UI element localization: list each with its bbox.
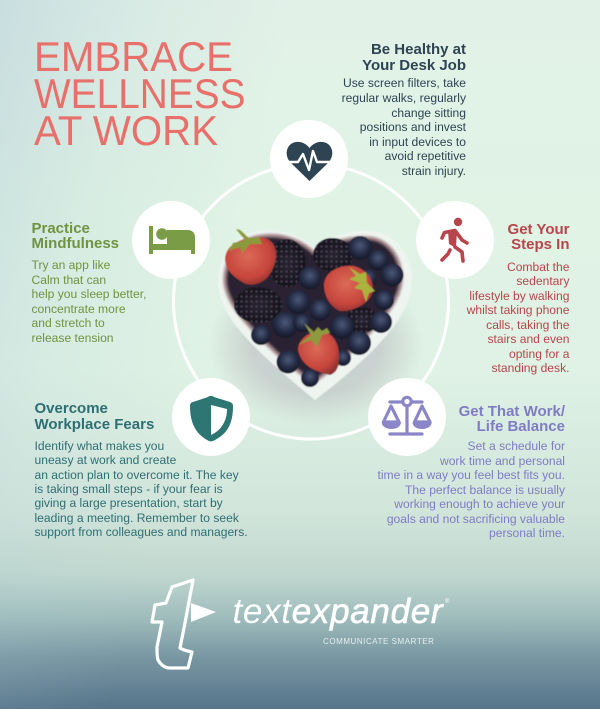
panel: get that work/life balance: goals and not sacrificing valuable xyxy=(387,512,565,526)
panel: practice mindfulness: Mindfulness xyxy=(32,235,119,252)
title: WELLNESS xyxy=(34,70,246,117)
panel: be healthy at your desk job xyxy=(342,41,466,178)
panel: get your steps in: sedentary xyxy=(516,274,570,288)
registered mark: ® xyxy=(445,599,449,605)
panel: overcome workplace fears: is taking small steps - if your fear is xyxy=(34,482,223,496)
ring connecting the five circles xyxy=(174,164,448,439)
panel: practice mindfulness: concentrate more xyxy=(32,302,126,316)
panel: get your steps in: Get Your xyxy=(508,221,570,238)
panel: get that work/life balance: Get That Work/ xyxy=(459,402,565,420)
panel: get your steps in: opting for a xyxy=(509,347,570,361)
circle: scales icon xyxy=(368,378,446,456)
panel: get that work/life balance: The perfect balance is usually xyxy=(405,483,565,497)
panel: practice mindfulness: Practice xyxy=(32,220,90,237)
panel: get your steps in: lifestyle by walking xyxy=(469,289,570,303)
panel: practice mindfulness: Try an app like xyxy=(32,258,110,272)
panel: overcome workplace fears: an action plan to overcome it. The key xyxy=(34,468,239,482)
panel: practice mindfulness: Calm that can xyxy=(32,273,106,287)
title xyxy=(34,33,246,154)
panel: overcome workplace fears: Overcome xyxy=(34,400,108,417)
panel: get that work/life balance: Set a schedule for xyxy=(468,439,565,453)
panel: overcome workplace fears: leading a meeting. Remember to seek xyxy=(34,511,239,525)
panel: get that work/life balance xyxy=(377,402,565,540)
panel: be healthy at your desk job: avoid repetitive xyxy=(385,149,466,163)
panel: get your steps in xyxy=(466,221,570,375)
panel: practice mindfulness xyxy=(32,220,146,345)
panel: get that work/life balance: working enough to achieve your xyxy=(394,497,565,511)
panel: be healthy at your desk job: regular walks, regularly xyxy=(342,91,466,105)
circle: bed icon xyxy=(132,201,210,279)
panel: get your steps in: Combat the xyxy=(507,260,570,274)
panel: practice mindfulness: help you sleep better, xyxy=(32,287,146,301)
panel: get your steps in: whilst taking phone xyxy=(467,303,570,317)
panel: be healthy at your desk job: change sitting xyxy=(391,106,466,120)
panel: get your steps in: standing desk. xyxy=(492,361,570,375)
panel: get that work/life balance: Life Balance xyxy=(477,418,565,434)
circle: shield icon xyxy=(172,378,250,456)
logo tagline: COMMUNICATE SMARTER xyxy=(323,637,434,646)
panel: practice mindfulness: release tension xyxy=(32,331,114,345)
panel: be healthy at your desk job: Your Desk Job xyxy=(362,57,466,74)
panel: overcome workplace fears: giving a large presentation, start by xyxy=(34,496,223,510)
panel: be healthy at your desk job: in input devices to xyxy=(369,135,466,149)
panel: be healthy at your desk job: Use screen filters, take xyxy=(343,76,466,90)
logo: textexpander xyxy=(150,578,450,670)
panel: get your steps in: calls, taking the xyxy=(486,318,570,332)
panel: get your steps in: Steps In xyxy=(511,236,570,253)
panel: get that work/life balance: time in a way you feel best fits you. xyxy=(377,468,565,482)
panel: be healthy at your desk job: strain injury. xyxy=(402,164,466,178)
panel: get that work/life balance: personal time. xyxy=(489,526,565,540)
circle: heart icon xyxy=(270,120,348,198)
panel: overcome workplace fears xyxy=(34,400,248,539)
panel: get that work/life balance: work time and personal xyxy=(440,454,565,468)
strawberries xyxy=(225,229,375,375)
heart bowl with berries xyxy=(208,229,424,425)
blueberries xyxy=(251,236,404,387)
panel: overcome workplace fears: Workplace Fears xyxy=(34,416,154,432)
panel: be healthy at your desk job: Be Healthy at xyxy=(371,41,466,58)
title: EMBRACE xyxy=(34,33,233,80)
panel: be healthy at your desk job: positions and invest xyxy=(360,120,466,134)
panel: overcome workplace fears: Identify what makes you xyxy=(34,439,164,453)
panel: overcome workplace fears: uneasy at work and create xyxy=(34,453,176,467)
title: AT WORK xyxy=(34,107,218,154)
panel: overcome workplace fears: support from colleagues and managers. xyxy=(34,525,248,539)
blackberries xyxy=(234,238,378,333)
logo wordmark: textexpander xyxy=(232,592,443,631)
circle: walking icon xyxy=(416,201,494,279)
logo mark xyxy=(150,578,216,670)
panel: practice mindfulness: and stretch to xyxy=(32,316,105,330)
panel: get your steps in: stairs and even xyxy=(487,332,570,346)
